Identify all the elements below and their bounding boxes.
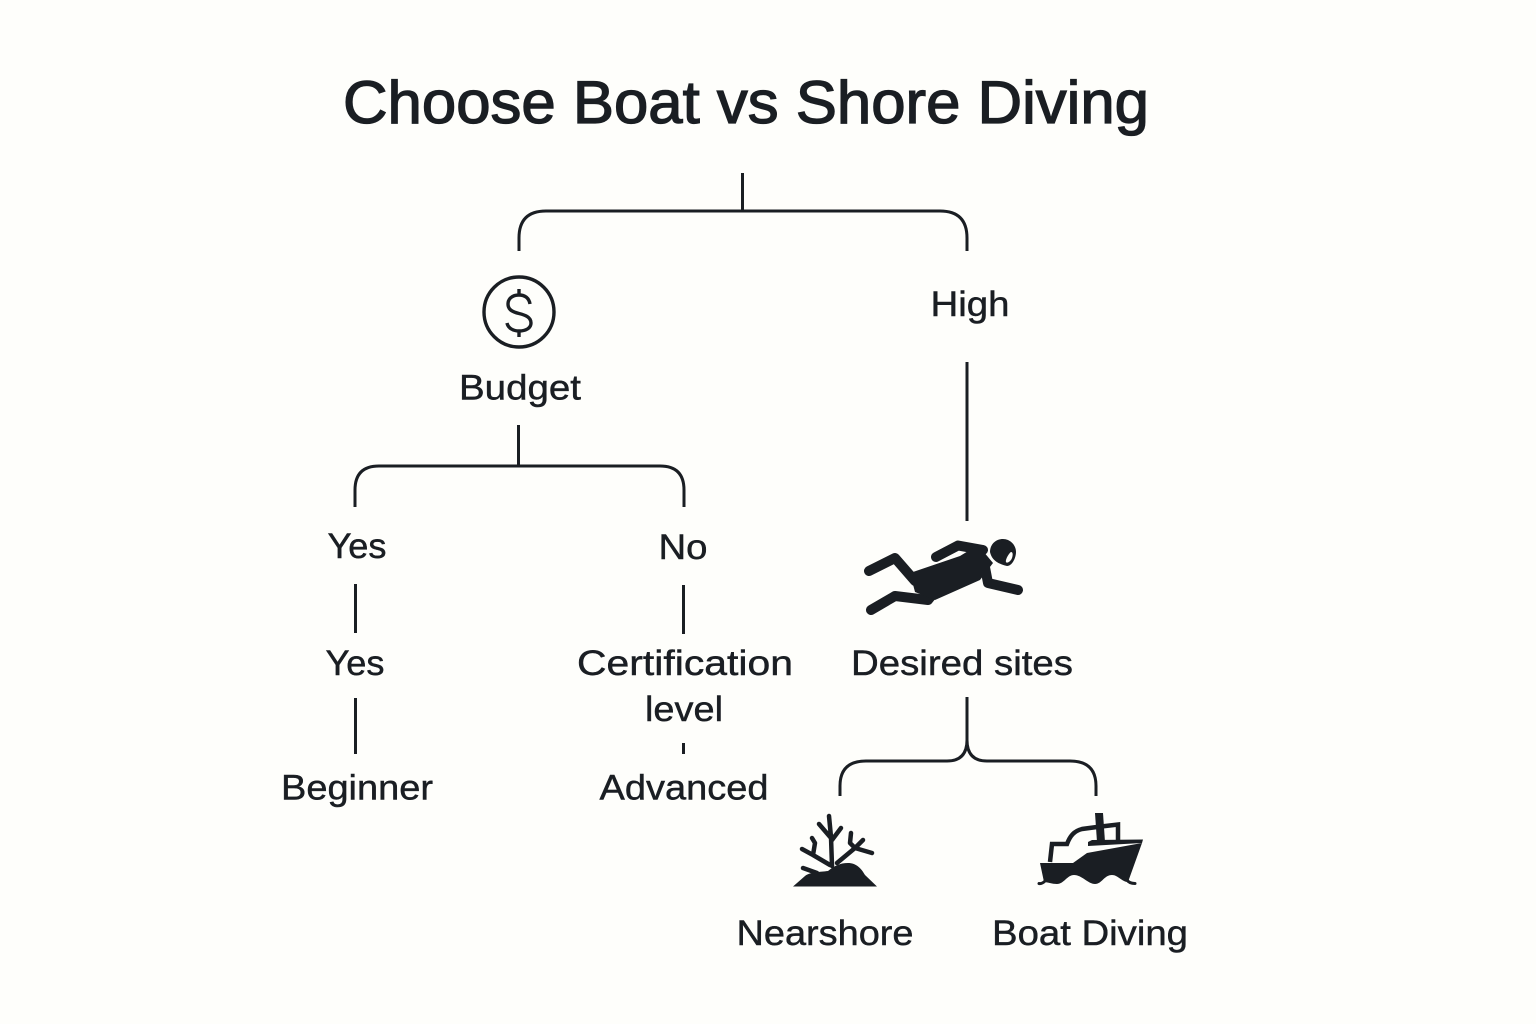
connector: Desired sites branch (840, 697, 1096, 796)
label: Certification level: level (645, 690, 723, 729)
connector: Yes to Beginner (354, 698, 357, 754)
connector: High to diver (966, 362, 968, 521)
connector: level to Advanced (682, 743, 685, 754)
label: Nearshore: Nearshore (736, 914, 914, 953)
label: High: High (930, 285, 1010, 324)
icon: boat (1039, 813, 1143, 884)
label: Certification level: Certification (577, 644, 793, 683)
icon: dollar coin (484, 277, 554, 347)
title: Choose Boat vs Shore Diving (343, 69, 1149, 136)
label: Yes (left branch): Yes (328, 527, 386, 566)
label: Beginner: Beginner (281, 768, 433, 808)
connector: No to Certification level (682, 585, 685, 634)
connector: Budget branch (355, 425, 684, 507)
connector: root branch (519, 173, 967, 251)
label: Budget: Budget (459, 368, 581, 408)
label: Advanced: Advanced (600, 768, 768, 808)
label: Yes (second): Yes (326, 644, 384, 683)
label: Desired sites: Desired sites (851, 644, 1073, 683)
connector: Yes to Yes (354, 584, 357, 633)
icon: coral (793, 816, 877, 886)
label: No: No (658, 528, 708, 567)
label: Boat Diving: Boat Diving (992, 914, 1188, 953)
icon: diver (869, 539, 1018, 610)
label: Certification level (577, 644, 793, 729)
